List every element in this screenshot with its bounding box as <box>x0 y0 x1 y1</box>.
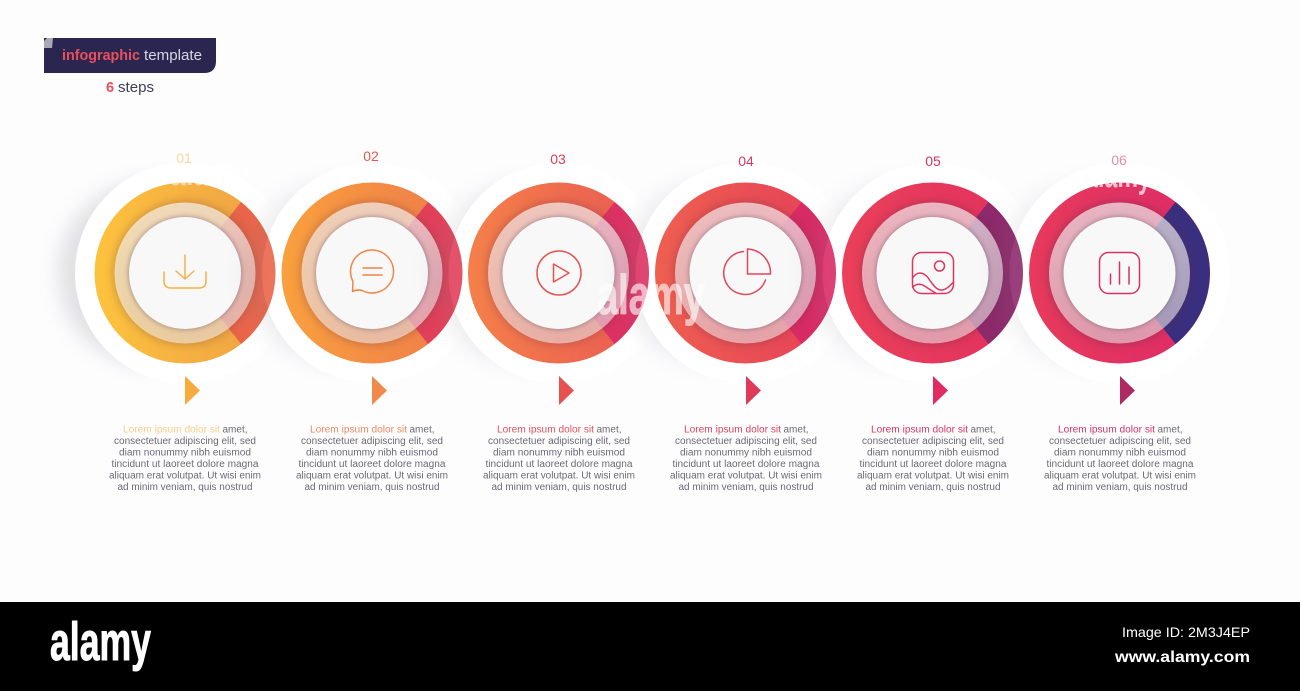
text block 2 <box>296 424 448 493</box>
website: www.alamy.com <box>1114 649 1250 666</box>
text block 1: consectetuer adipiscing elit, sed <box>114 436 256 447</box>
step 5 circle <box>812 182 1023 364</box>
text block 3 <box>483 424 635 493</box>
faint watermark fragments over the first and last circles <box>170 152 1151 196</box>
icon: chat bubble <box>351 250 394 293</box>
text block 4: Lorem ipsum dolor sit <box>684 424 781 436</box>
text block 3: ad minim veniam, quis nostrud <box>492 482 626 493</box>
subtitle: 6 steps: steps <box>118 80 154 96</box>
header badge: template <box>144 48 202 64</box>
text block 2: Lorem ipsum dolor sit <box>310 424 407 436</box>
text block 1: aliquam erat volutpat. Ut wisi enim <box>109 470 261 482</box>
step 1 circle <box>58 181 276 365</box>
text block 5: aliquam erat volutpat. Ut wisi enim <box>857 470 1009 482</box>
icon: bar chart <box>1100 252 1140 294</box>
text block 3: consectetuer adipiscing elit, sed <box>488 436 630 447</box>
footer logo: alamy <box>50 612 151 672</box>
step numbers: 05 <box>925 153 941 169</box>
step numbers: 01 <box>176 150 192 166</box>
text block 1: diam nonummy nibh euismod <box>119 448 251 458</box>
watermark: alamy <box>597 263 705 326</box>
white halos behind the circles <box>75 163 1230 383</box>
text block 6: aliquam erat volutpat. Ut wisi enim <box>1044 470 1196 482</box>
step numbers <box>176 148 1127 169</box>
text block 4: diam nonummy nibh euismod <box>680 448 812 458</box>
step numbers: 02 <box>363 148 379 164</box>
text block 5: tincidunt ut laoreet dolore magna <box>860 459 1007 470</box>
text block 1: amet, <box>222 424 248 436</box>
text block 1: Lorem ipsum dolor sit <box>123 424 220 436</box>
text block 4: amet, <box>784 424 808 436</box>
text block 4: consectetuer adipiscing elit, sed <box>675 436 817 447</box>
text block 6: Lorem ipsum dolor sit <box>1058 424 1155 436</box>
step 2 circle <box>248 182 462 364</box>
text block 4: tincidunt ut laoreet dolore magna <box>672 459 820 470</box>
step numbers: 06 <box>1111 152 1127 168</box>
subtitle: 6 steps: 6 <box>106 80 114 96</box>
arrows <box>185 376 1135 405</box>
header badge: infographic <box>62 48 140 64</box>
text block 1 <box>109 424 261 493</box>
text block 5 <box>857 424 1009 493</box>
text block 2: ad minim veniam, quis nostrud <box>304 482 440 493</box>
text block 2: diam nonummy nibh euismod <box>306 448 438 458</box>
step 4 circle <box>622 182 836 364</box>
text block 6: amet, <box>1158 424 1182 436</box>
image id: Image ID: 2M3J4EP <box>1122 624 1250 640</box>
faint watermark fragments over the first and last circles: alamy <box>1085 154 1151 196</box>
text block 4: aliquam erat volutpat. Ut wisi enim <box>670 470 822 482</box>
text block 3: Lorem ipsum dolor sit <box>497 424 594 436</box>
text block 6: tincidunt ut laoreet dolore magna <box>1046 459 1194 470</box>
step 6 circle <box>1010 182 1210 364</box>
footer bar <box>0 602 1300 691</box>
text block 2: amet, <box>410 424 434 436</box>
text block 4 <box>670 424 822 493</box>
text block 3: diam nonummy nibh euismod <box>493 448 625 458</box>
icon: play <box>537 251 581 295</box>
icon: pie chart <box>724 249 771 294</box>
text block 6 <box>1044 424 1196 493</box>
step numbers: 03 <box>550 151 566 167</box>
text block 4: ad minim veniam, quis nostrud <box>678 482 814 493</box>
text block 6: consectetuer adipiscing elit, sed <box>1049 436 1191 447</box>
text block 3: amet, <box>596 424 622 436</box>
text block 5: diam nonummy nibh euismod <box>867 448 999 458</box>
text block 5: Lorem ipsum dolor sit <box>871 424 968 436</box>
text block 5: ad minim veniam, quis nostrud <box>866 482 1000 493</box>
text block 2: aliquam erat volutpat. Ut wisi enim <box>296 470 448 482</box>
step numbers: 04 <box>738 153 754 169</box>
text block 3: aliquam erat volutpat. Ut wisi enim <box>483 470 635 482</box>
header badge <box>44 38 216 73</box>
text block 3: tincidunt ut laoreet dolore magna <box>486 459 633 470</box>
text block 6: ad minim veniam, quis nostrud <box>1052 482 1188 493</box>
step 3 circle <box>434 182 649 364</box>
text block 6: diam nonummy nibh euismod <box>1054 448 1186 458</box>
text block 1: ad minim veniam, quis nostrud <box>118 482 252 493</box>
icon: download <box>164 255 206 288</box>
faint watermark fragments over the first and last circles: alamy <box>170 152 250 194</box>
text block 5: amet, <box>970 424 996 436</box>
icon: image <box>912 252 954 294</box>
text block 2: consectetuer adipiscing elit, sed <box>301 436 443 447</box>
text block 1: tincidunt ut laoreet dolore magna <box>112 459 259 470</box>
text block 5: consectetuer adipiscing elit, sed <box>862 436 1004 447</box>
text block 2: tincidunt ut laoreet dolore magna <box>298 459 446 470</box>
